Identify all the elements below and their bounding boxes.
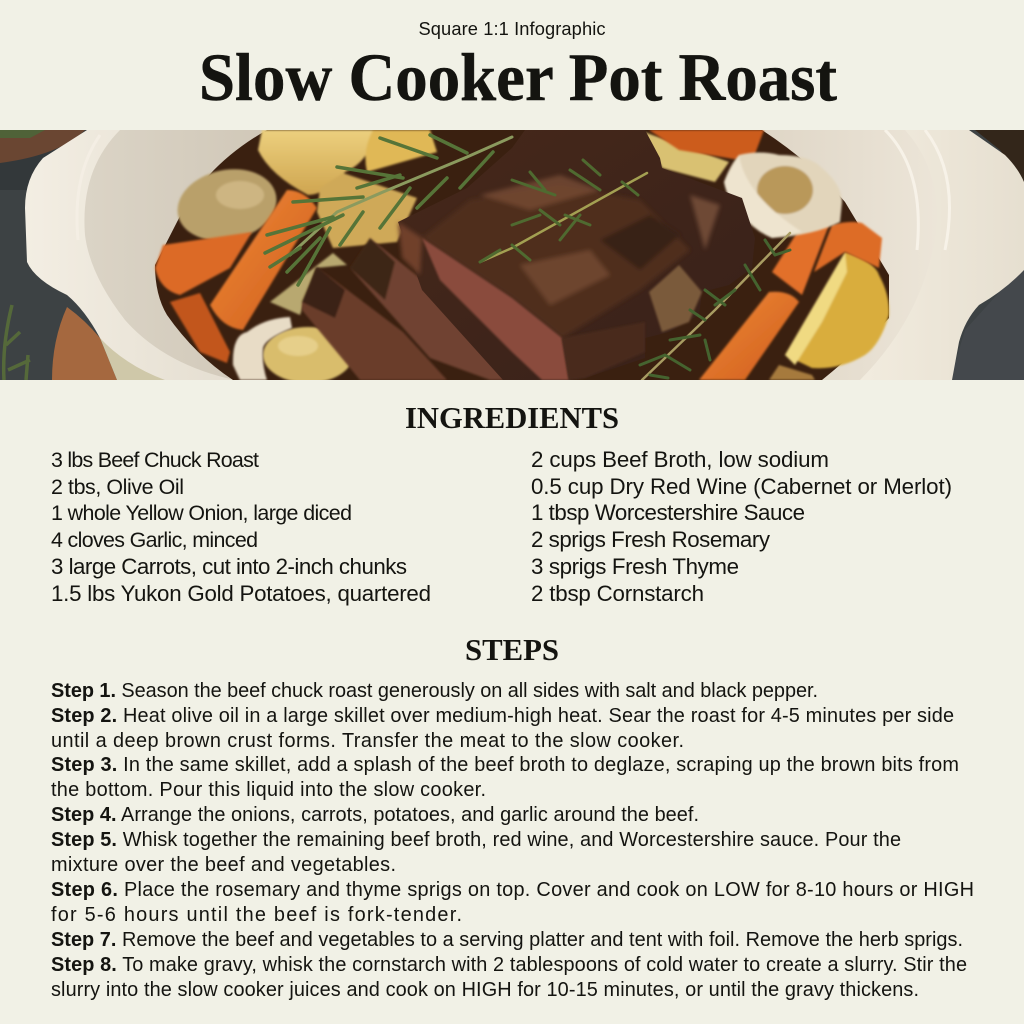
ingredients left column: 3 large Carrots, cut into 2-inch chunks <box>51 554 407 579</box>
steps list: Step 8. To make gravy, whisk the cornstarch with 2 tablespoons of cold water to create a slurry. Stir the <box>51 954 967 976</box>
onions <box>233 152 842 380</box>
ingredients right column: 0.5 cup Dry Red Wine (Cabernet or Merlot) <box>531 474 952 499</box>
title: Slow Cooker Pot Roast <box>199 39 837 115</box>
photo: pot roast in slow cooker <box>0 130 1024 383</box>
steps list <box>51 680 974 1001</box>
ingredients left column: 3 lbs Beef Chuck Roast <box>51 448 259 472</box>
steps list: Step 2. Heat olive oil in a large skillet over medium-high heat. Sear the roast for 4-5 minutes per side <box>51 705 954 727</box>
beef roast <box>398 130 755 380</box>
carrots <box>155 130 882 380</box>
ingredients left column: 1.5 lbs Yukon Gold Potatoes, quartered <box>51 581 431 606</box>
steps list: Step 5. Whisk together the remaining beef broth, red wine, and Worcestershire sauce. Pour the <box>51 829 901 851</box>
ingredients right column: 2 tbsp Cornstarch <box>531 581 704 606</box>
subtitle: Square 1:1 Infographic <box>418 18 606 39</box>
ingredients right column: 2 cups Beef Broth, low sodium <box>531 447 829 472</box>
steps list: slurry into the slow cooker juices and cook on HIGH for 10-15 minutes, or until the gravy thickens. <box>51 979 919 1001</box>
steps list: Step 6. Place the rosemary and thyme sprigs on top. Cover and cook on LOW for 8-10 hours or HIGH <box>51 879 974 901</box>
photo background table <box>0 130 1024 380</box>
steps list: mixture over the beef and vegetables. <box>51 854 396 876</box>
ingredients right column <box>531 447 952 606</box>
steps list: the bottom. Pour this liquid into the slow cooker. <box>51 779 486 801</box>
ingredients right column: 2 sprigs Fresh Rosemary <box>531 527 771 552</box>
ingredients left column: 2 tbs, Olive Oil <box>51 475 184 499</box>
ingredients left column: 1 whole Yellow Onion, large diced <box>51 501 352 525</box>
steps list: Step 7. Remove the beef and vegetables to a serving platter and tent with foil. Remove the herb sprigs. <box>51 929 963 951</box>
ingredients right column: 3 sprigs Fresh Thyme <box>531 554 739 579</box>
potatoes <box>171 130 889 383</box>
ingredients right column: 1 tbsp Worcestershire Sauce <box>531 500 805 525</box>
ingredients left column: 4 cloves Garlic, minced <box>51 528 258 552</box>
sliced beef <box>302 238 512 380</box>
herbs rosemary and thyme <box>265 135 790 380</box>
heading: steps: STEPS <box>465 632 559 667</box>
heading: ingredients: INGREDIENTS <box>405 400 619 435</box>
slow cooker crock <box>25 130 1024 380</box>
steps list: Step 4. Arrange the onions, carrots, potatoes, and garlic around the beef. <box>51 804 699 826</box>
steps list: Step 1. Season the beef chuck roast generously on all sides with salt and black pepper. <box>51 680 818 702</box>
steps list: Step 3. In the same skillet, add a splash of the beef broth to deglaze, scraping up the brown bits from <box>51 754 959 776</box>
ingredients left column <box>51 448 431 606</box>
steps list: for 5-6 hours until the beef is fork-tender. <box>51 904 462 926</box>
steps list: until a deep brown crust forms. Transfer the meat to the slow cooker. <box>51 730 684 752</box>
